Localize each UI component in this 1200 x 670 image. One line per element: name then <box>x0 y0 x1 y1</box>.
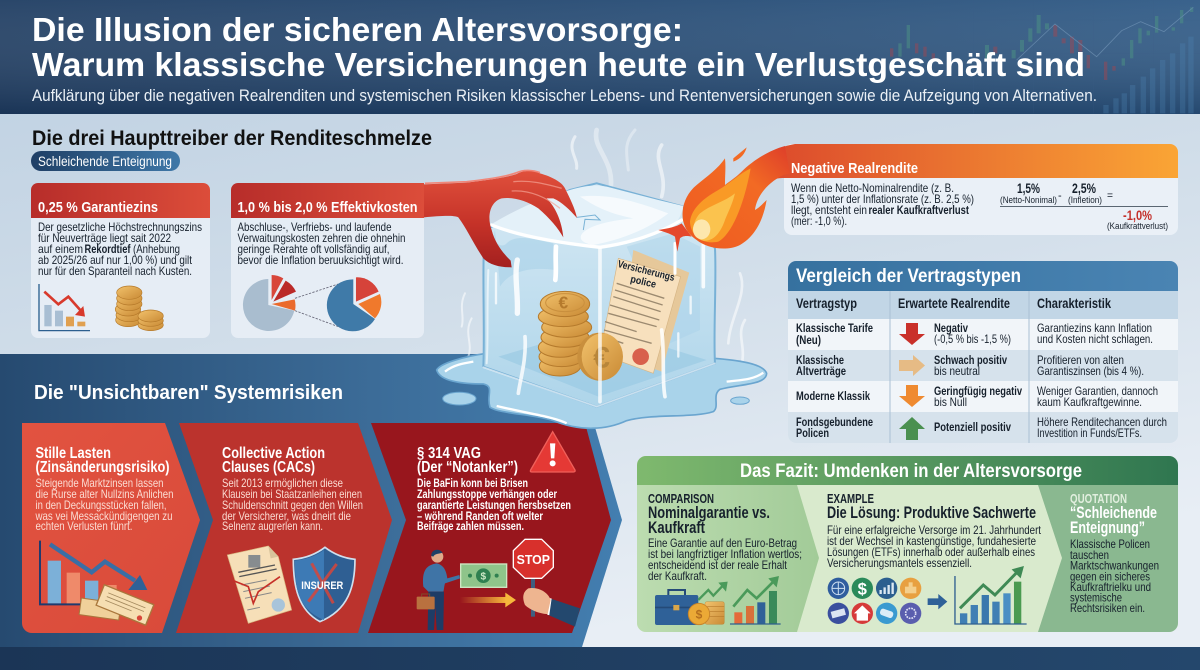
footer band <box>0 647 1200 670</box>
chart: rising bars <box>955 566 1027 624</box>
arrow: yellow flow <box>460 593 516 607</box>
column: Quotation: Klassische Policen <box>1070 537 1150 551</box>
hand reaching from card <box>424 170 577 267</box>
column: Comparison: Nominalgarantie vs. <box>648 504 770 522</box>
chevron: Collective Action Clauses: der Versicherer, was dneirt die <box>222 509 351 523</box>
row: Altverträge: Profitieren von alten <box>1037 353 1124 367</box>
panel: Negative Realrendite: Negative Realrendite <box>791 160 918 177</box>
icon: briefcase, coins and growth: $ <box>696 607 703 621</box>
panel: Negative Realrendite: realer Kaufkraftverlust <box>868 203 969 217</box>
row: Altverträge <box>796 353 1144 378</box>
chevron: Stille Lasten: die Rurse alter Nullzins Anlichen <box>36 487 174 501</box>
chevron: Paragraph 314 VAG <box>368 423 611 633</box>
column: Example: Lösungen (ETFs) innerhalb oder außerhalb eines <box>827 545 1035 559</box>
flame on ice <box>658 146 790 252</box>
title: Warum klassische Versicherungen heute ein Verlustgeschäft sind <box>32 46 1085 83</box>
panel: Vergleich der Vertragstypen: Charakteristik <box>1037 295 1111 311</box>
icon: stop sign with hand: STOP <box>517 552 550 567</box>
panel: Negative Realrendite: llegt, entsteht ein <box>791 203 867 217</box>
row: Altverträge: Klassische <box>796 353 844 367</box>
chevron: Collective Action Clauses: Selnenz augrerlen kann. <box>222 519 323 533</box>
row: Fondsgebundene Policen: Fondsgebundene <box>796 415 873 429</box>
chevron: Stille Lasten: echten Verlusten fünrt. <box>36 519 132 533</box>
chevron: Paragraph 314 VAG: (Der “Notanker”) <box>417 459 518 476</box>
pill: Schleichende Enteignung <box>31 151 180 171</box>
row: Moderne Klassik: Geringfügig negativ <box>934 384 1022 398</box>
panel: Das Fazit <box>637 456 1178 632</box>
header banner <box>0 0 1200 114</box>
icon: man with briefcase and banknote <box>417 550 507 630</box>
column: Example: ist der Wechsel in kastengünstige, fundahesierte <box>827 534 1036 548</box>
icon: briefcase, coins and growth <box>655 576 781 625</box>
column: Comparison: COMPARISON <box>648 492 714 506</box>
euro coin stack: € <box>558 292 568 312</box>
chevron: Collective Action Clauses: Seit 2013 ermöglichen diese <box>222 476 343 490</box>
column: Quotation: Enteignung” <box>1070 519 1145 537</box>
chevron: Paragraph 314 VAG: – wöhrend Randen oft welter <box>417 509 543 523</box>
column: Quotation: QUOTATION <box>1070 492 1127 506</box>
card: Garantiezins <box>31 183 210 338</box>
steam wisps <box>462 130 745 370</box>
row: Fondsgebundene Policen: Höhere Renditechancen durch <box>1037 415 1167 429</box>
chevron: Paragraph 314 VAG: Beifräge zahlen müssen. <box>417 519 524 533</box>
card: Effektivkosten: geringe Rerahte oft vollsfändig auf, <box>238 242 390 256</box>
insurance policy document: Versicherungs <box>616 259 676 284</box>
icon: falling bar chart and coins <box>39 284 163 331</box>
column: Example <box>827 492 1042 624</box>
row: Fondsgebundene Policen: Potenziell positiv <box>934 420 1011 434</box>
arrow: to portfolio chart <box>928 594 947 609</box>
formula: Realrendite: 2,5% <box>1072 181 1096 196</box>
panel: unsichtbare Systemrisiken <box>0 354 622 647</box>
chevron: Stille Lasten <box>22 423 200 633</box>
column: Quotation: “Schleichende <box>1070 504 1157 522</box>
row: Moderne Klassik <box>796 384 1158 409</box>
panel: Vergleich der Vertragstypen: Vertragstyp <box>796 295 857 311</box>
row: Moderne Klassik: bis Null <box>934 395 967 409</box>
column: Quotation: Kaufkraftrielku und <box>1070 580 1151 594</box>
formula: Realrendite <box>1000 181 1168 231</box>
column: Example: EXAMPLE <box>827 492 874 506</box>
icon: pie charts <box>243 275 381 331</box>
row: Klassische Tarife: Negativ <box>934 321 968 335</box>
panel: Negative Realrendite <box>770 144 1178 235</box>
title: Die Illusion der sicheren Altersvorsorge: <box>32 11 683 48</box>
row: Moderne Klassik: kaum Kaufkraftgewinne. <box>1037 395 1142 409</box>
panel: Vergleich der Vertragstypen: Erwartete Realrendite <box>898 295 1010 311</box>
column: Quotation: Marktschwankungen <box>1070 558 1159 572</box>
chevron: Paragraph 314 VAG: § 314 VAG <box>417 445 481 462</box>
icon: torn contract <box>227 546 292 623</box>
icon: man with briefcase and banknote: $ <box>481 571 487 582</box>
card: Garantiezins: ab 2025/26 auf nur 1,00 %) und gilt <box>38 253 193 267</box>
icon: falling chart with bonds <box>40 541 154 625</box>
card: Garantiezins: nur für den Sparanteil nach Kusten. <box>38 264 192 278</box>
chevron: Paragraph 314 VAG: garantierte Leistungen hersbsetzen <box>417 498 571 512</box>
puddle <box>437 353 767 428</box>
chevron: Paragraph 314 VAG: Zahlungsstoppe verhängen oder <box>417 487 557 501</box>
card: Garantiezins: Der gesetzliche Höchstrechnungszins <box>38 220 202 234</box>
chevron: Stille Lasten: was vei Messackündigengen zu <box>35 509 173 523</box>
panel: Das Fazit: Das Fazit: Umdenken in der Altersvorsorge <box>740 461 1082 482</box>
icons: asset class circles <box>828 578 921 624</box>
chevron: Stille Lasten: (Zinsänderungsrisiko) <box>36 459 170 476</box>
panel: Vergleich der Vertragstypen: Vergleich der Vertragstypen <box>796 266 1021 287</box>
chevron: Collective Action Clauses: Clauses (CACs) <box>222 459 315 476</box>
column: Quotation <box>1070 492 1159 615</box>
section heading: Haupttreiber: Die drei Haupttreiber der Renditeschmelze <box>32 126 432 150</box>
cube body <box>483 183 715 407</box>
column: Quotation: gegen ein sicheres <box>1070 570 1150 584</box>
column: Comparison: ist bei langfriztiger Inflation wertlos; <box>648 547 802 561</box>
large euro coin <box>577 333 623 381</box>
insurance policy document <box>600 250 689 373</box>
formula: Realrendite: (Netto-Nonimal) <box>1000 195 1057 205</box>
column: Comparison: Kaufkraft <box>648 519 705 537</box>
row: Fondsgebundene Policen: Investition in Funds/ETFs. <box>1037 426 1142 440</box>
card: Garantiezins: Rekordtief <box>84 242 131 256</box>
icon: insurer shield: INSURER <box>301 580 343 592</box>
title <box>32 11 1085 83</box>
column: Quotation: systemische <box>1070 590 1122 604</box>
ice highlights and drips <box>483 186 715 407</box>
chevron: Stille Lasten: Stille Lasten <box>36 445 111 462</box>
formula: Realrendite: (Kaufkrattverlust) <box>1107 221 1168 231</box>
panel: Negative Realrendite: 1,5 %) unter der Inflationsrate (z. B. 2,5 %) <box>791 192 974 206</box>
formula: Realrendite: (Infletion) <box>1068 195 1102 205</box>
formula: Realrendite: - <box>1058 190 1062 202</box>
column: Example: Versicherungsmantels essenziell. <box>827 556 972 570</box>
card: Effektivkosten: bevor die Inflation beruuksichtigt wird. <box>238 253 404 267</box>
row: Klassische Tarife: (-0,5 % bis -1,5 %) <box>934 332 1011 346</box>
candlestick chart decoration <box>800 0 1200 113</box>
chevron: Collective Action Clauses: Klausein bei Staatzanleihen einen <box>222 487 362 501</box>
icon: warning triangle <box>530 432 575 472</box>
euro coin stack <box>538 291 592 376</box>
card: Garantiezins: auf einem <box>38 242 83 256</box>
icon: insurer shield <box>293 547 355 622</box>
illustration: melting ice cube <box>424 130 790 428</box>
formula: Realrendite: 1,5% <box>1017 181 1040 196</box>
formula: Realrendite: = <box>1107 190 1113 202</box>
row: Fondsgebundene Policen: Policen <box>796 426 829 440</box>
chevron: Stille Lasten: Steigende Marktzinsen lassen <box>36 476 164 490</box>
column: Comparison <box>648 492 802 625</box>
card: Garantiezins: 0,25 % Garantiezins <box>38 199 158 216</box>
row: Moderne Klassik: Moderne Klassik <box>796 389 870 403</box>
subtitle: Aufklärung über die negativen Realrenditen und systemischen Risiken klassischer Lebens- und Rentenversicherungen sowie die Aufzeigung von Alternativen. <box>32 86 1097 105</box>
chevron: Paragraph 314 VAG: Die BaFin konn bei Brisen <box>417 476 528 490</box>
row: Fondsgebundene Policen <box>796 415 1167 440</box>
row: Altverträge: Garantiszinsen (bis 4 %). <box>1037 364 1144 378</box>
icon: stop sign with hand <box>513 539 580 627</box>
column: Comparison: der Kaufkraft. <box>648 569 707 583</box>
chevron: Collective Action Clauses: Schuldenschnitt gegen den Willen <box>222 498 363 512</box>
column: Comparison: Eine Garantie auf den Euro-Betrag <box>648 536 797 550</box>
row: Klassische Tarife: (Neu) <box>796 333 821 347</box>
icons: asset class circles: $ <box>858 579 868 598</box>
column: Quotation: Rechtsrisiken ein. <box>1070 601 1145 615</box>
row: Moderne Klassik: Weniger Garantien, dannoch <box>1037 384 1158 398</box>
large euro coin: € <box>593 341 610 374</box>
pill: Schleichende Enteignung: Schleichende Enteignung <box>38 154 172 169</box>
card: Effektivkosten <box>231 183 424 338</box>
chevron: Stille Lasten: in den Deckungsstücken fallen, <box>36 498 166 512</box>
heading: Systemrisiken: Die "Unsichtbaren" Systemrisiken <box>34 382 343 404</box>
formula: Realrendite: -1,0% <box>1123 207 1152 223</box>
card: Effektivkosten: Verwaitungskosten zehren die ohnehin <box>238 231 406 245</box>
row: Klassische Tarife: Klassische Tarife <box>796 321 873 335</box>
row: Klassische Tarife: Garantiezins kann Inflation <box>1037 321 1152 335</box>
insurance policy document: police <box>629 274 657 291</box>
row: Altverträge: bis neutral <box>934 364 980 378</box>
panel: Vergleich der Vertragstypen <box>788 261 1178 443</box>
panel: Negative Realrendite: Wenn die Netto-Nominalrendite (z. B. <box>791 181 954 195</box>
row: Klassische Tarife: und Kosten nicht schlagen. <box>1037 332 1153 346</box>
column: Comparison: entscheidend ist der reale Erhalt <box>648 558 788 572</box>
panel: Negative Realrendite: (mer: -1,0 %). <box>791 214 847 228</box>
column: Example: Die Lösung: Produktive Sachwerte <box>827 504 1036 522</box>
row: Klassische Tarife <box>796 321 1153 347</box>
card: Garantiezins: für Neuverträge liegt sait 2022 <box>38 231 171 245</box>
chevron: Collective Action Clauses: Collective Action <box>222 445 325 462</box>
column: Quotation: tauschen <box>1070 548 1109 562</box>
column: Example: Für eine erfalgreiche Versorge im 21. Jahrhundert <box>827 523 1042 537</box>
row: Altverträge: Schwach positiv <box>934 353 1007 367</box>
card: Effektivkosten: 1,0 % bis 2,0 % Effektivkosten <box>238 199 418 216</box>
card: Effektivkosten: Abschluse-, Verfriebs- und laufende <box>238 220 392 234</box>
row: Altverträge: Altverträge <box>796 364 846 378</box>
chevron: Collective Action Clauses <box>176 423 392 633</box>
card: Garantiezins: (Anhebung <box>133 242 180 256</box>
